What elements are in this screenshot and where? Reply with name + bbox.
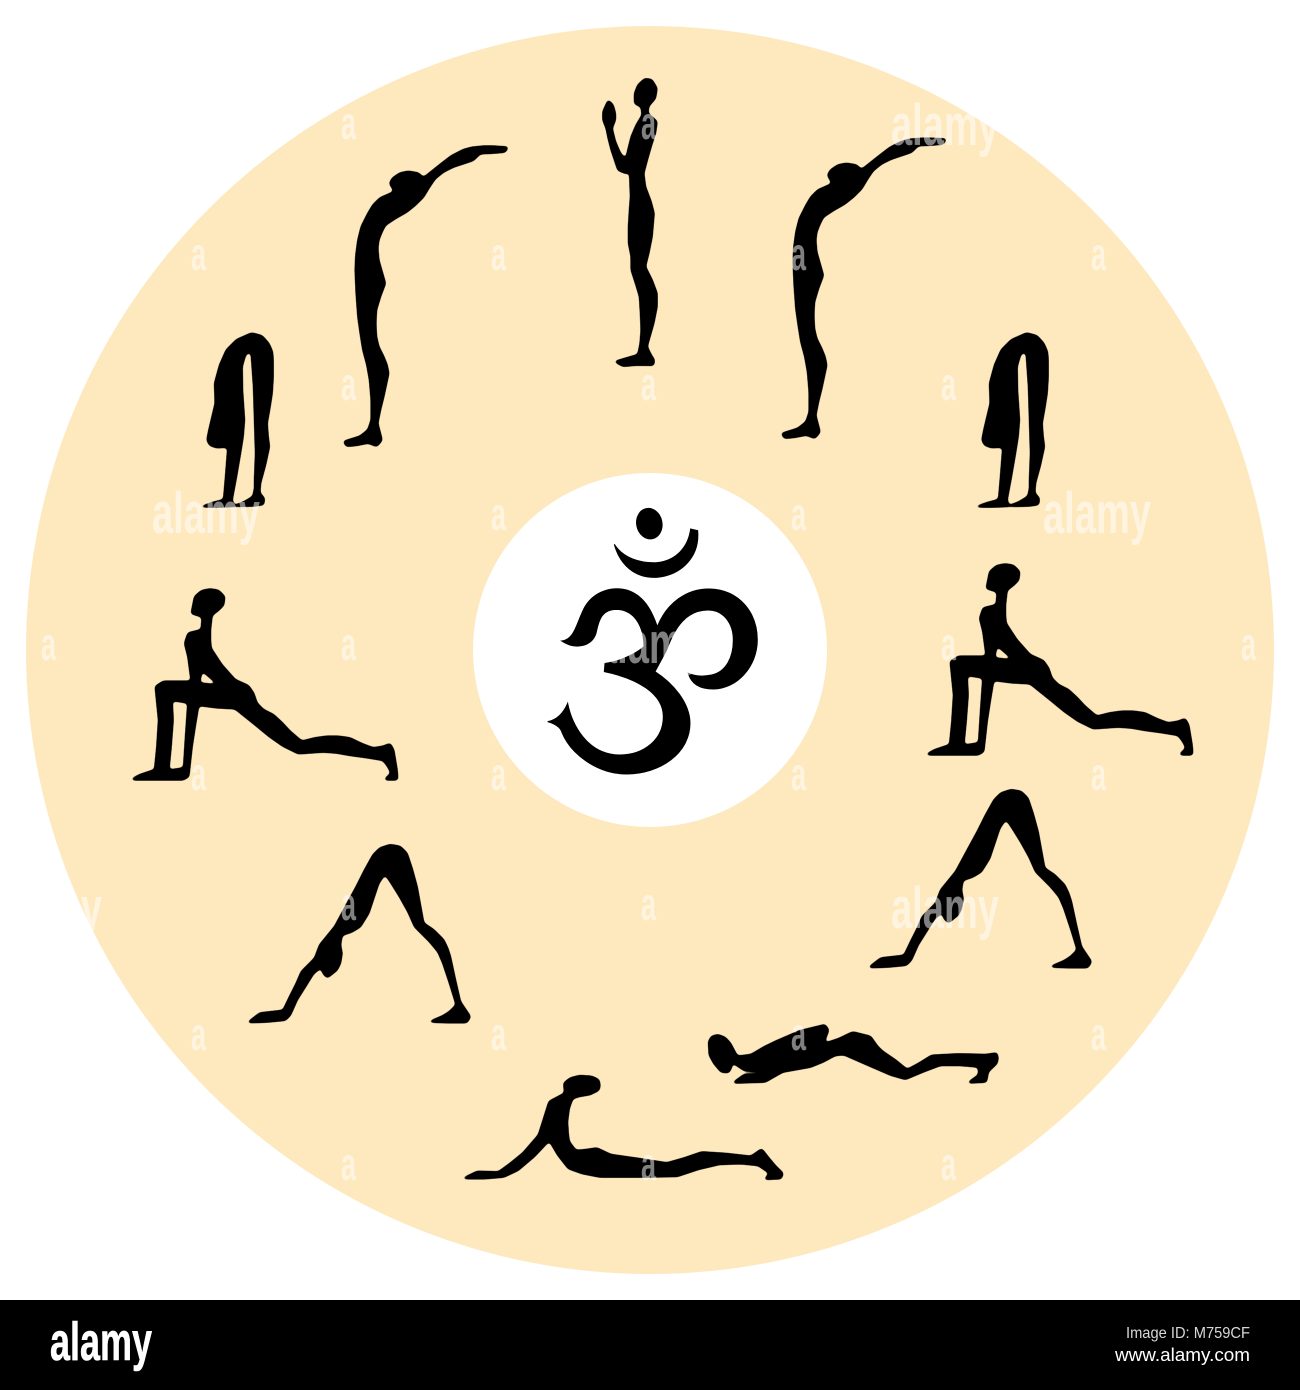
om dot xyxy=(634,506,665,541)
watermarks: a xyxy=(191,228,206,280)
center white circle xyxy=(473,473,827,827)
pose: downward dog left xyxy=(248,845,470,1022)
watermarks: a xyxy=(1241,618,1256,670)
watermarks: alamy xyxy=(1043,481,1151,546)
watermarks: a xyxy=(791,1008,806,1060)
watermarks: a xyxy=(941,618,956,670)
watermarks: a xyxy=(341,1138,356,1190)
watermarks: a xyxy=(791,488,806,540)
om main glyph xyxy=(548,589,757,774)
footer bar xyxy=(0,1300,1300,1390)
yoga figures group xyxy=(132,79,1192,1179)
watermarks: a xyxy=(1091,748,1106,800)
watermarks: alamy xyxy=(891,876,999,941)
pose: lunge right xyxy=(927,564,1192,754)
watermarks: a xyxy=(641,97,656,149)
watermarks: a xyxy=(491,1008,506,1060)
pose: eight limbs xyxy=(709,1025,998,1083)
pose: forward fold right xyxy=(977,333,1048,507)
watermarks: a xyxy=(491,488,506,540)
watermarks: alamy xyxy=(596,611,704,676)
watermarks: a xyxy=(641,1138,656,1190)
website: www.alamy.com xyxy=(1114,1345,1250,1365)
watermarks: a xyxy=(941,358,956,410)
watermarks: a xyxy=(41,618,56,670)
watermarks: a xyxy=(1091,228,1106,280)
watermarks: a xyxy=(341,358,356,410)
watermarks: a xyxy=(791,228,806,280)
footer logo: alamy xyxy=(50,1312,152,1372)
image id: Image ID: M759CF xyxy=(1126,1325,1250,1342)
watermarks: a xyxy=(341,618,356,670)
pose: standing prayer top xyxy=(603,79,657,366)
watermarks: a xyxy=(941,1138,956,1190)
watermarks: a xyxy=(191,1008,206,1060)
watermarks: a xyxy=(341,878,356,930)
pose: raised arms left xyxy=(344,147,508,446)
watermarks: a xyxy=(1091,1008,1106,1060)
watermarks: alamy xyxy=(891,93,999,158)
icon: om symbol xyxy=(548,506,757,774)
watermarks: a xyxy=(341,97,356,149)
watermarks: a xyxy=(191,748,206,800)
om crescent xyxy=(614,529,698,577)
watermarks: a xyxy=(491,748,506,800)
watermarks: a xyxy=(791,748,806,800)
watermarks: a xyxy=(641,358,656,410)
pose: raised arms right xyxy=(782,139,946,438)
watermarks: a xyxy=(641,878,656,930)
watermarks: a xyxy=(491,228,506,280)
watermarks xyxy=(0,93,1256,1190)
pose: lunge left xyxy=(132,589,397,779)
pose: cobra xyxy=(464,1076,783,1179)
pose: downward dog right xyxy=(869,790,1091,967)
pose: forward fold left xyxy=(202,333,273,507)
watermarks: alamy xyxy=(152,481,260,546)
